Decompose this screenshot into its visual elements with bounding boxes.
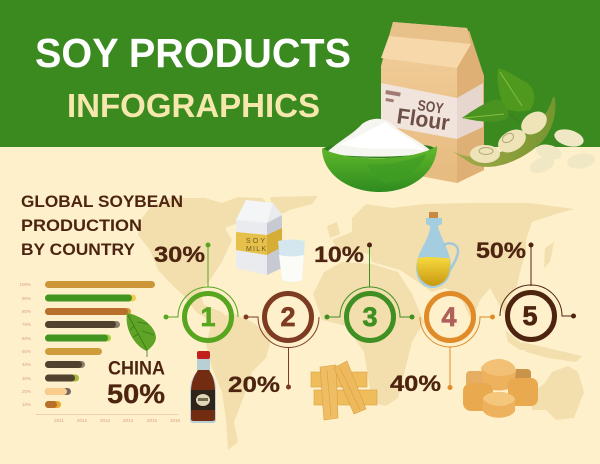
title: SOY PRODUCTS: [35, 30, 351, 76]
bars: [45, 281, 155, 408]
callout: China 50%: CHINA: [108, 358, 165, 380]
x axis labels: 2011: [54, 418, 64, 423]
percentage labels: 40%: [390, 371, 441, 396]
percentage labels: 20%: [228, 372, 280, 397]
y axis labels: 60%: [22, 336, 31, 341]
icon: soy sticks: [311, 361, 377, 420]
x axis labels: [54, 418, 181, 423]
x axis labels: 2014: [123, 418, 134, 423]
callout: China 50%: [107, 358, 165, 409]
x axis labels: 2013: [100, 418, 111, 423]
icon: tofu cubes: [463, 359, 538, 418]
callout: China 50%: 50%: [107, 379, 165, 409]
y axis labels: 100%: [19, 282, 31, 287]
number 5: 5: [522, 301, 538, 331]
number 3: 3: [362, 302, 378, 332]
step 2: [244, 294, 319, 390]
icon: soy milk carton and glass: MILK: [246, 246, 266, 253]
step 3: [324, 242, 414, 340]
y axis labels: 10%: [22, 402, 31, 407]
icon: soybean pod and leaves: [452, 68, 596, 176]
chart heading: GLOBAL SOYBEAN: [21, 193, 183, 211]
green header band: [0, 0, 600, 147]
y axis labels: 40%: [22, 362, 31, 367]
y axis labels: 90%: [22, 296, 31, 301]
icon: leaf: [127, 313, 156, 357]
y axis labels: 30%: [22, 376, 31, 381]
chart heading: PRODUCTION: [21, 217, 142, 235]
step 5: [500, 242, 576, 340]
x axis labels: 2015: [147, 418, 158, 423]
y axis labels: 70%: [22, 322, 31, 327]
y axis labels: 50%: [22, 349, 31, 354]
x axis labels: 2012: [77, 418, 88, 423]
percentage labels: 50%: [476, 238, 526, 263]
number 4: 4: [441, 302, 457, 332]
y axis labels: [19, 282, 31, 407]
y axis labels: 20%: [22, 389, 31, 394]
subtitle: INFOGRAPHICS: [67, 87, 320, 124]
bag label text: Flour: [395, 103, 452, 135]
number 2: 2: [280, 302, 296, 332]
icon: oil bottle: [416, 212, 458, 288]
icon: bowl of flour: [322, 119, 437, 192]
icon: soy milk carton and glass: SOY: [246, 238, 265, 245]
bar chart: [19, 281, 181, 423]
x axis labels: 2016: [170, 418, 181, 423]
bag label text: SOY: [416, 97, 445, 118]
icon: soy milk carton and glass: [236, 200, 305, 282]
chart heading: BY COUNTRY: [21, 241, 135, 259]
world map: [138, 196, 584, 450]
number 1: 1: [200, 302, 216, 332]
y axis labels: 80%: [22, 309, 31, 314]
chart heading: [21, 193, 183, 259]
percentage labels: [154, 238, 526, 397]
percentage labels: 30%: [154, 242, 205, 267]
percentage labels: 10%: [314, 242, 364, 267]
icon: soy flour bag: [381, 22, 484, 183]
step 4: [420, 294, 495, 390]
step 1: [164, 242, 238, 340]
icon: soy sauce bottle: [190, 351, 216, 423]
